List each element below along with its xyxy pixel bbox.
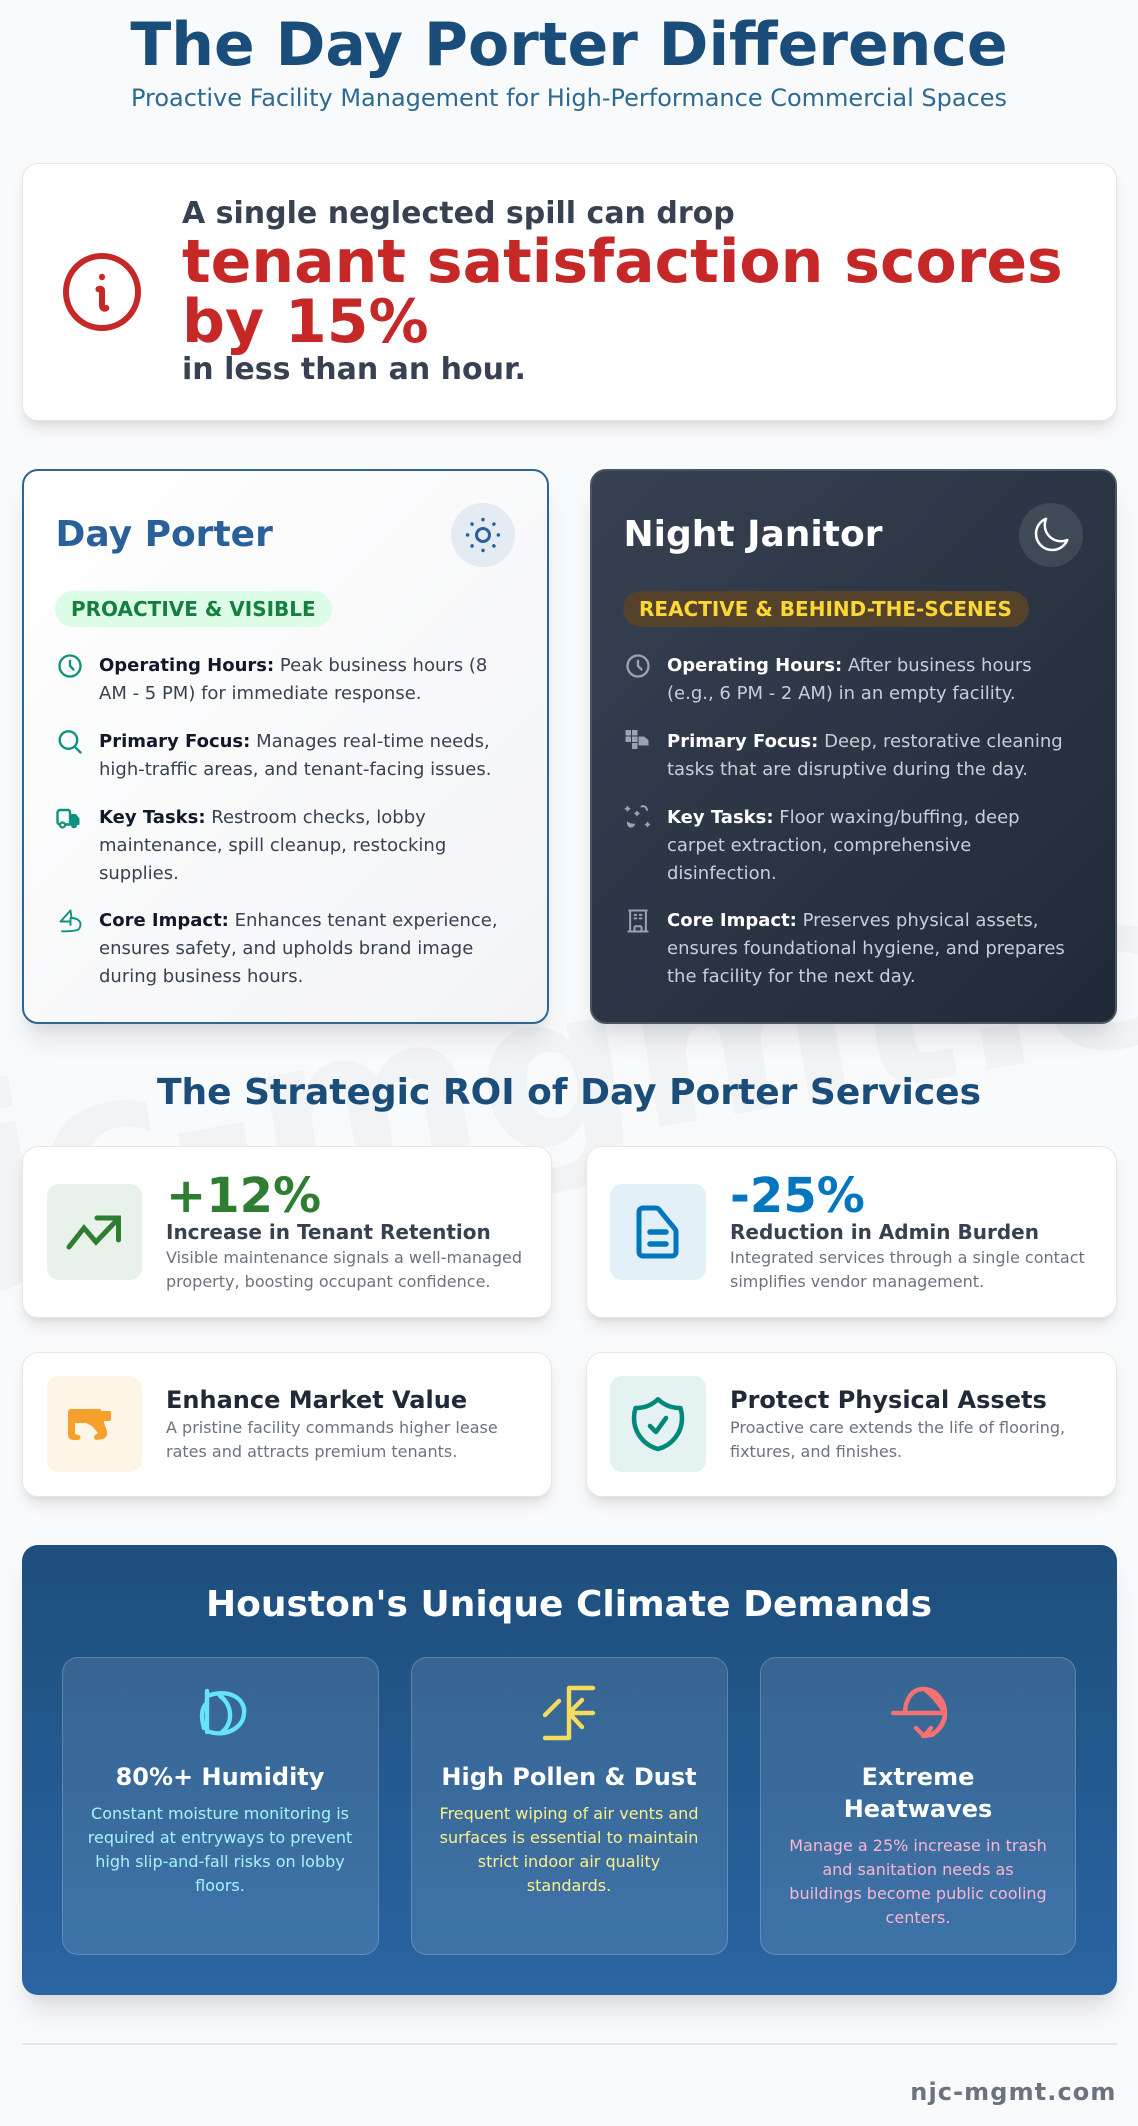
badge: proactive and visible bbox=[55, 591, 332, 626]
item: key tasks: carpet extraction, comprehensive bbox=[667, 835, 971, 856]
item: primary focus: high-traffic areas, and tenant-facing issues. bbox=[99, 759, 491, 780]
description: pollen and dust bbox=[440, 1804, 698, 1894]
panel: tenant retention bbox=[22, 1146, 552, 1318]
card: humidity bbox=[62, 1657, 378, 1955]
description: humidity: floors. bbox=[195, 1876, 245, 1894]
icon: truck bbox=[56, 808, 80, 829]
description: extreme heatwaves: buildings become public cooling bbox=[789, 1884, 1047, 1902]
description: humidity: Constant moisture monitoring is bbox=[91, 1804, 349, 1822]
item: core impact: ensures safety, and upholds brand image bbox=[99, 938, 473, 959]
icon: trending up bbox=[46, 1184, 142, 1280]
card: extreme heatwaves bbox=[760, 1657, 1076, 1955]
description: tenant retention bbox=[166, 1248, 522, 1291]
item: key tasks: disinfection. bbox=[667, 863, 777, 884]
badge: reactive and behind-the-scenes: REACTIVE & BEHIND-THE-SCENES bbox=[639, 597, 1012, 621]
icon: shield check bbox=[610, 1376, 706, 1472]
stat: +12%: +12% bbox=[166, 1168, 321, 1224]
item: key tasks: Key Tasks: Restroom checks, lobby bbox=[99, 807, 426, 828]
icon: office building bbox=[628, 910, 648, 932]
subtitle: Proactive Facility Management for High-Performance Commercial Spaces bbox=[131, 84, 1007, 112]
hero closing line: in less than an hour. bbox=[182, 352, 526, 386]
icon: information circle bbox=[63, 253, 141, 331]
description: humidity bbox=[88, 1804, 352, 1894]
heading: day porter: Day Porter bbox=[56, 514, 273, 554]
description: extreme heatwaves: Manage a 25% increase in trash bbox=[789, 1836, 1047, 1854]
panel: physical assets bbox=[586, 1352, 1116, 1497]
icon: building blocks bbox=[626, 730, 648, 749]
item: core impact: ensures foundational hygiene, and prepares bbox=[667, 938, 1065, 959]
panel: night janitor bbox=[590, 469, 1116, 1024]
description: pollen and dust: surfaces is essential to maintain bbox=[440, 1828, 698, 1846]
description: pollen and dust: Frequent wiping of air vents and bbox=[440, 1804, 698, 1822]
item: primary focus: Primary Focus: Deep, restorative cleaning bbox=[667, 731, 1063, 752]
item: core impact bbox=[60, 910, 498, 987]
item: key tasks bbox=[624, 805, 1020, 884]
item: primary focus bbox=[626, 730, 1063, 780]
description: admin burden bbox=[730, 1248, 1085, 1291]
title: The Day Porter Difference bbox=[130, 10, 1008, 80]
item: primary focus: Primary Focus: Manages real-time needs, bbox=[99, 731, 490, 752]
item: key tasks: supplies. bbox=[99, 863, 179, 884]
hero lead-in: A single neglected spill can drop bbox=[182, 196, 735, 230]
icon: market value shape bbox=[46, 1376, 142, 1472]
icon: sun bbox=[451, 503, 515, 567]
item: operating hours bbox=[626, 654, 1032, 704]
icon: document bbox=[610, 1184, 706, 1280]
hero key statistic bbox=[182, 226, 1063, 356]
description: market value: A pristine facility commands higher lease bbox=[166, 1418, 498, 1437]
panel: day porter bbox=[22, 469, 549, 1024]
hero text bbox=[182, 196, 1063, 386]
heading: extreme heatwaves bbox=[844, 1763, 992, 1823]
panel: hero statistic bbox=[22, 163, 1116, 421]
footer divider and brand bbox=[22, 2043, 1116, 2113]
description: market value bbox=[166, 1418, 498, 1461]
description: extreme heatwaves bbox=[789, 1836, 1047, 1926]
icon: magnifier bbox=[58, 730, 82, 754]
label: reduction in admin burden: Reduction in Admin Burden bbox=[730, 1220, 1039, 1244]
item: key tasks: maintenance, spill cleanup, restocking bbox=[99, 835, 446, 856]
icon: sparkles bbox=[624, 805, 650, 828]
icon: clock bbox=[58, 654, 82, 678]
panel: houston climate bbox=[22, 1545, 1116, 1995]
panel: market value bbox=[22, 1352, 552, 1497]
heading: protect physical assets: Protect Physical Assets bbox=[730, 1386, 1047, 1414]
heading: strategic roi: The Strategic ROI of Day Porter Services bbox=[157, 1072, 981, 1112]
icon: clock bbox=[626, 654, 650, 678]
heading: night janitor: Night Janitor bbox=[624, 514, 882, 554]
item: primary focus bbox=[58, 730, 491, 780]
item: primary focus: tasks that are disruptive during the day. bbox=[667, 759, 1028, 780]
heading: extreme heatwaves: Extreme bbox=[862, 1763, 974, 1791]
description: pollen and dust: standards. bbox=[527, 1876, 611, 1894]
item: operating hours: Operating Hours: After business hours bbox=[667, 655, 1032, 676]
description: admin burden: Integrated services through a single contact bbox=[730, 1248, 1085, 1267]
heading: houston climate: Houston's Unique Climate Demands bbox=[206, 1584, 932, 1625]
description: physical assets bbox=[730, 1418, 1065, 1461]
item: core impact: the facility for the next day. bbox=[667, 966, 916, 987]
heading: humidity: 80%+ Humidity bbox=[116, 1763, 324, 1791]
heading: pollen and dust: High Pollen & Dust bbox=[441, 1763, 697, 1791]
item: key tasks bbox=[56, 807, 446, 884]
item: core impact: during business hours. bbox=[99, 966, 303, 987]
item: operating hours: (e.g., 6 PM - 2 AM) in an empty facility. bbox=[667, 683, 1016, 704]
description: tenant retention: Visible maintenance signals a well-managed bbox=[166, 1248, 522, 1267]
description: humidity: required at entryways to prevent bbox=[88, 1828, 352, 1846]
icon: humidity bbox=[200, 1688, 246, 1736]
description: pollen and dust: strict indoor air quality bbox=[478, 1852, 660, 1870]
item: core impact: Core Impact: Preserves physical assets, bbox=[667, 910, 1038, 931]
card: pollen and dust bbox=[410, 1657, 728, 1955]
description: physical assets: Proactive care extends the life of flooring, bbox=[730, 1418, 1065, 1437]
item: key tasks: Key Tasks: Floor waxing/buffing, deep bbox=[667, 807, 1020, 828]
icon: moon bbox=[1019, 503, 1083, 567]
heading: enhance market value: Enhance Market Value bbox=[166, 1386, 467, 1414]
icon: pollen bbox=[542, 1686, 596, 1740]
label: increase in tenant retention: Increase in Tenant Retention bbox=[166, 1220, 491, 1244]
description: physical assets: fixtures, and finishes. bbox=[730, 1442, 902, 1461]
hero key statistic: tenant satisfaction scores bbox=[182, 226, 1063, 296]
description: admin burden: simplifies vendor management. bbox=[730, 1272, 984, 1291]
item: operating hours: Operating Hours: Peak business hours (8 bbox=[99, 655, 487, 676]
icon: heat bbox=[890, 1686, 948, 1738]
description: market value: rates and attracts premium tenants. bbox=[166, 1442, 457, 1461]
item: core impact: Core Impact: Enhances tenant experience, bbox=[99, 910, 498, 931]
item: operating hours: AM - 5 PM) for immediate response. bbox=[99, 683, 422, 704]
description: tenant retention: property, boosting occupant confidence. bbox=[166, 1272, 490, 1291]
description: extreme heatwaves: and sanitation needs as bbox=[822, 1860, 1014, 1878]
description: humidity: high slip-and-fall risks on lobby bbox=[95, 1852, 345, 1870]
item: operating hours bbox=[58, 654, 487, 704]
hero key statistic: by 15% bbox=[182, 286, 429, 356]
panel: admin burden bbox=[586, 1146, 1116, 1318]
description: extreme heatwaves: centers. bbox=[886, 1908, 950, 1926]
item: core impact bbox=[628, 910, 1065, 987]
badge: reactive and behind-the-scenes bbox=[623, 591, 1029, 626]
footer brand: njc-mgmt.com bbox=[910, 2078, 1116, 2106]
stat: -25%: -25% bbox=[730, 1168, 865, 1224]
icon: hand bbox=[60, 910, 82, 932]
badge: proactive and visible: PROACTIVE & VISIBLE bbox=[71, 597, 316, 621]
heading: extreme heatwaves: Heatwaves bbox=[844, 1795, 992, 1823]
